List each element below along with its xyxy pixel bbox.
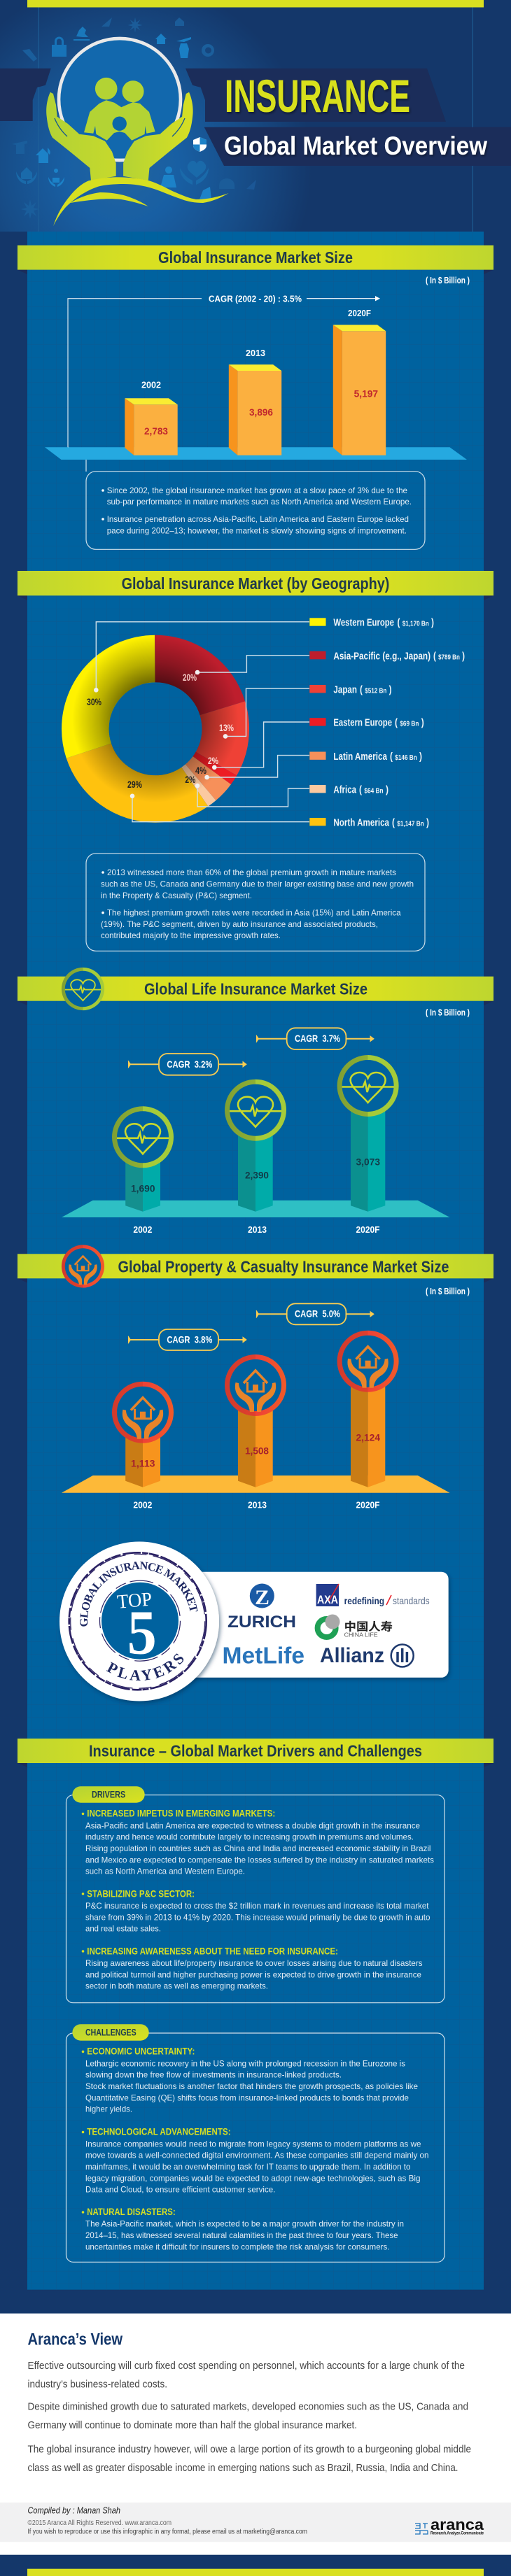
- bar 2002: 2,783: [144, 425, 168, 437]
- commentary box: contributed majorly to the impressive growth rates.: [101, 930, 281, 940]
- column 2002: 2002: [133, 1499, 152, 1510]
- icon: dollar coin: [202, 44, 214, 57]
- commentary box: Insurance penetration across Asia-Pacific, Latin America and Eastern Europe lacked: [107, 514, 409, 524]
- column 2002: [112, 1106, 174, 1235]
- heading banner: [18, 1739, 493, 1767]
- column 2020F: 2020F: [356, 1224, 380, 1235]
- challenge: natural disasters: The Asia-Pacific market, which is expected to be a major growth driver for the industry in: [85, 2219, 404, 2229]
- CAGR pill 3.8%: CAGR 3.8%: [167, 1333, 213, 1345]
- icon: doctor: [160, 167, 176, 187]
- panel: drivers and challenges: [18, 1739, 493, 2262]
- challenges box: [66, 2024, 444, 2262]
- icon: family: [84, 78, 155, 141]
- challenge: natural disasters: uncertainties make it difficult for insurers to complete the risk analysis for consumers.: [85, 2242, 389, 2251]
- challenges pill: [72, 2024, 149, 2041]
- icon: faint house: [175, 17, 184, 26]
- panel: property and casualty insurance market size: [18, 1245, 493, 1510]
- view text: Effective outsourcing will curb fixed cost spending on personnel, which accounts for a large chunk of the: [28, 2361, 465, 2372]
- column 2020F: 3,073: [356, 1156, 380, 1168]
- challenge: technological advancements: Insurance companies would need to migrate from legacy systems to modern platforms as we: [85, 2139, 421, 2149]
- legend: Africa: [333, 784, 357, 795]
- icon: faint pen: [246, 180, 256, 190]
- column 2002: 2002: [133, 1224, 152, 1235]
- bar 2013: [229, 348, 281, 455]
- view text: class as well as greater disposable income in emerging nations such as Brazil, Russia, India and China.: [28, 2463, 458, 2474]
- challenge: economic uncertainty: [82, 2046, 418, 2114]
- leader lines and dots: [94, 622, 309, 822]
- column 2002: 1,690: [131, 1182, 155, 1194]
- driver: emerging markets: Rising population in countries such as China and India and increased economic stability in Brazil: [85, 1843, 431, 1853]
- column 2020F: [337, 1055, 399, 1235]
- logo card: [182, 1572, 449, 1678]
- footer strip: If you wish to reproduce or use this infographic in any format, please email us at marketing@aranca.com: [28, 2528, 307, 2536]
- legend: ( $146 Bn ): [390, 751, 422, 763]
- driver: emerging markets: INCREASED IMPETUS IN EMERGING MARKETS:: [87, 1809, 275, 1819]
- heading banner: Insurance – Global Market Drivers and Challenges: [89, 1742, 422, 1760]
- percentage labels: 4%: [195, 765, 206, 776]
- icon: sunburst top: [127, 17, 143, 32]
- donut chart: [85, 658, 225, 799]
- challenges pill: CHALLENGES: [85, 2026, 136, 2037]
- panel: top 5 players: [59, 1542, 451, 1704]
- heading banner: [18, 246, 493, 274]
- driver: emerging markets: Asia-Pacific and Latin America are expected to witness a double digit growth in the insurance: [85, 1820, 420, 1830]
- commentary box: The highest premium growth rates were recorded in Asia (15%) and Latin America: [107, 908, 401, 918]
- legend: [309, 618, 465, 828]
- challenge: natural disasters: NATURAL DISASTERS:: [87, 2207, 176, 2217]
- heading banner: Global Property & Casualty Insurance Market Size: [118, 1257, 449, 1275]
- challenge: natural disasters: 2014–15, has witnessed several natural calamities in the past three to four years. These: [85, 2230, 398, 2240]
- icon: left hand: [46, 92, 116, 181]
- challenge: economic uncertainty: Quantitative Easing (QE) shifts focus from insurance-linked products to bonds that provide: [85, 2093, 409, 2102]
- logo: China Life: CHINA LIFE: [344, 1632, 378, 1639]
- stamp: top 5: [59, 1542, 223, 1704]
- heading banner: [18, 968, 493, 1010]
- icon: sunburst left: [21, 199, 39, 219]
- challenge: technological advancements: move towards a well-connected digital environment. As these companies still depend mainly on: [85, 2151, 428, 2160]
- icon: swoosh: [53, 177, 229, 226]
- legend: Eastern Europe: [333, 718, 392, 729]
- column 2013: 2013: [248, 1499, 267, 1510]
- icon: cloud: [219, 178, 234, 189]
- logo: Zurich: Z: [255, 1586, 270, 1609]
- header hero: [0, 0, 511, 232]
- logo: MetLife: MetLife: [223, 1643, 304, 1668]
- chart platform: [62, 1475, 449, 1493]
- drivers box: [66, 1786, 444, 2003]
- chart platform: [62, 1201, 449, 1217]
- icon: car wreck: [74, 27, 90, 41]
- challenge: technological advancements: TECHNOLOGICAL ADVANCEMENTS:: [87, 2127, 231, 2137]
- legend: North America: [333, 817, 390, 828]
- title: INSURANCE: INSURANCE: [225, 70, 410, 122]
- challenge: economic uncertainty: ECONOMIC UNCERTAINTY:: [87, 2046, 195, 2057]
- icon: shield: [193, 137, 206, 152]
- commentary box: such as the US, Canada and Germany due to their larger existing base and new growth: [101, 879, 414, 889]
- challenge: technological advancements: legacy migration, companies would be expected to adopt new-age technologies, such as Big: [85, 2173, 420, 2183]
- icon: house in hands: [16, 167, 37, 184]
- icon: person in hands: [48, 169, 64, 187]
- commentary box: [86, 854, 425, 951]
- bar 2013: 3,896: [249, 406, 273, 418]
- icon: graduation cap: [12, 141, 27, 154]
- driver: emerging markets: such as North America and Western Europe.: [85, 1867, 245, 1876]
- dark title bands: [0, 69, 511, 166]
- main blue panel with grid: [27, 232, 484, 2290]
- commentary box: [86, 472, 425, 549]
- bar 2020F: [333, 308, 386, 455]
- column 2013: [225, 1080, 286, 1235]
- bracket line and CAGR arrow: [68, 294, 380, 472]
- legend: ( $789 Bn ): [433, 651, 465, 662]
- chart platform: [45, 447, 467, 460]
- bar 2020F: 5,197: [354, 388, 378, 399]
- icon: bag: [200, 187, 211, 199]
- top accent bar: [27, 0, 484, 7]
- commentary box: in the Property & Casualty (P&C) segment.: [101, 891, 252, 900]
- legend: ( $1,147 Bn ): [392, 817, 429, 828]
- commentary box: sub-par performance in mature markets such as North America and Western Europe.: [107, 497, 412, 507]
- driver: emerging markets: [82, 1809, 434, 1876]
- legend: ( $1,170 Bn ): [398, 618, 434, 629]
- logo: AXA: redefining: [344, 1595, 384, 1606]
- bar 2002: 2002: [141, 380, 161, 390]
- logo: aranca: Research.Analyze.Communicate: [430, 2532, 484, 2536]
- driver: awareness: [82, 1946, 422, 1991]
- CAGR pill 3.7%: CAGR 3.7%: [295, 1033, 340, 1044]
- column 2002: [112, 1382, 174, 1510]
- legend: ( $69 Bn ): [395, 718, 424, 729]
- legend: Western Europe: [333, 618, 394, 629]
- heading banner: Global Insurance Market Size: [158, 248, 353, 267]
- icon: house: [155, 34, 167, 44]
- challenge: technological advancements: Data and Cloud, to ensure efficient customer service.: [85, 2185, 275, 2195]
- icon: faint shield left: [22, 49, 37, 62]
- stamp: top 5: 5: [127, 1598, 157, 1667]
- percentage labels: 2%: [185, 774, 196, 785]
- challenge: economic uncertainty: Lethargic economic recovery in the US along with prolonged recession in the Eurozone is: [85, 2058, 405, 2068]
- panel: global life insurance market size: [18, 968, 493, 1235]
- footer strip: Compiled by : Manan Shah: [28, 2505, 120, 2516]
- driver: awareness: and political turmoil and higher purchasing power is expected to drive growth in the insurance: [85, 1969, 421, 1979]
- CAGR pill 3.7%: [256, 1028, 374, 1049]
- logo: China Life: 中国人寿: [344, 1620, 393, 1633]
- bar 2002: [125, 380, 178, 455]
- legend: Asia-Pacific (e.g., Japan): [333, 651, 430, 662]
- logo: AXA: AXA: [317, 1593, 338, 1606]
- driver: emerging markets: industry and hence would contribute largely to increasing growth in premiums and volumes.: [85, 1832, 414, 1842]
- percentage labels: 13%: [219, 722, 234, 733]
- panel: market by geography: [18, 571, 493, 951]
- footer strip: [0, 2503, 511, 2542]
- unit note: ( In $ Billion ): [426, 1008, 470, 1018]
- stamp: top 5: PLAYERS: [106, 1653, 183, 1680]
- percentage labels: 2%: [208, 755, 218, 766]
- view text: Despite diminished growth due to saturated markets, developed economies such as the US, Canada and: [28, 2402, 468, 2413]
- driver: awareness: Rising awareness about life/property insurance to cover losses arising due to natural disasters: [85, 1958, 423, 1968]
- commentary box: 2013 witnessed more than 60% of the global premium growth in mature markets: [107, 868, 396, 877]
- logo: aranca: aranca: [430, 2516, 484, 2533]
- column 2013: 1,508: [245, 1445, 269, 1456]
- heading banner: [18, 1245, 493, 1288]
- driver: P&C sector: P&C insurance is expected to cross the $2 trillion mark in revenues and increase its total market: [85, 1901, 429, 1911]
- column 2013: [225, 1354, 286, 1510]
- icon: white ring: [59, 38, 181, 160]
- percentage labels: 29%: [127, 779, 142, 790]
- CAGR pill 5.0%: CAGR 5.0%: [295, 1308, 340, 1319]
- panel: global insurance market size: [18, 246, 493, 549]
- percentage labels: 30%: [87, 696, 102, 707]
- commentary box: pace during 2002–13; however, the market is slowly showing signs of improvement.: [107, 525, 407, 535]
- bottom accent bar: [27, 2569, 484, 2576]
- CAGR pill 3.2%: [128, 1054, 246, 1075]
- commentary box: (19%). The P&C segment, driven by auto insurance and associated products,: [101, 919, 378, 929]
- CAGR pill 5.0%: [256, 1303, 374, 1324]
- view text: Germany will continue to dominate more than half the global insurance market.: [28, 2420, 357, 2431]
- icon: umbrella person: [176, 37, 191, 58]
- driver: awareness: INCREASING AWARENESS ABOUT THE NEED FOR INSURANCE:: [87, 1946, 338, 1956]
- view text: [28, 2361, 471, 2474]
- panel: Aranca's view: [0, 2314, 511, 2555]
- unit note: ( In $ Billion ): [426, 1287, 470, 1296]
- stamp: top 5: TOP: [116, 1589, 153, 1613]
- drivers pill: [72, 1786, 145, 1803]
- column 2013: 2013: [248, 1224, 267, 1235]
- heading banner: Global Insurance Market (by Geography): [122, 574, 389, 593]
- challenge: economic uncertainty: higher yields.: [85, 2104, 132, 2114]
- challenge: economic uncertainty: Stock market fluctuations is another factor that hinders the growth prospects, as policies like: [85, 2081, 418, 2091]
- logo: China Life: [318, 1615, 393, 1639]
- CAGR pill 3.8%: [128, 1329, 246, 1350]
- column 2002: 1,113: [131, 1458, 155, 1469]
- legend: ( $64 Bn ): [359, 784, 388, 795]
- icon: burning house: [36, 148, 50, 163]
- percentage labels: [87, 672, 234, 790]
- column 2020F: 2,124: [356, 1431, 380, 1443]
- driver: P&C sector: STABILIZING P&C SECTOR:: [87, 1888, 195, 1899]
- driver: P&C sector: and real estate sales.: [85, 1924, 161, 1934]
- driver: P&C sector: [82, 1888, 430, 1934]
- icon: heart in hands: [180, 161, 209, 185]
- stamp: top 5: GLOBAL INSURANCE MARKET: [80, 1562, 198, 1627]
- icon: right hand: [123, 92, 193, 181]
- logo: Zurich: ZURICH: [227, 1613, 296, 1632]
- column 2020F: [337, 1331, 399, 1510]
- heading banner: Global Life Insurance Market Size: [144, 980, 368, 998]
- challenge: natural disasters: [82, 2207, 404, 2251]
- logo: Allianz: Allianz: [320, 1644, 384, 1667]
- view text: industry’s business-related costs.: [28, 2379, 167, 2390]
- driver: emerging markets: and Mexico are expected to compensate the losses suffered by the industry in saturated markets: [85, 1855, 434, 1864]
- background insurance icons: [12, 17, 256, 219]
- column 2013: 2,390: [245, 1170, 269, 1181]
- bracket line and CAGR arrow: CAGR (2002 - 20) : 3.5%: [209, 294, 302, 304]
- bar 2013: 2013: [246, 348, 265, 358]
- challenge: technological advancements: mainframes, it would be an overwhelming task for IT teams to upgrade them. In addition to: [85, 2162, 411, 2172]
- logo: AXA: standards: [393, 1595, 430, 1606]
- CAGR pill 3.2%: CAGR 3.2%: [167, 1059, 213, 1070]
- column 2020F: 2020F: [356, 1499, 380, 1510]
- challenge: economic uncertainty: slowing down the free flow of investments in insurance-linked products.: [85, 2070, 342, 2080]
- legend: Japan: [333, 684, 357, 695]
- logo: AXA: [316, 1584, 430, 1606]
- legend: ( $512 Bn ): [360, 684, 392, 695]
- logo: aranca: [415, 2516, 484, 2536]
- icon: lock: [52, 36, 66, 57]
- footer strip: ©2015 Aranca All Rights Reserved. www.aranca.com: [28, 2519, 172, 2527]
- icon: faint tool: [102, 17, 112, 27]
- bar 2020F: 2020F: [348, 308, 371, 318]
- driver: awareness: sector in both mature as well as emerging markets.: [85, 1981, 268, 1991]
- view heading: Aranca’s View: [28, 2330, 122, 2349]
- drivers pill: DRIVERS: [92, 1788, 125, 1799]
- challenge: technological advancements: [82, 2127, 428, 2195]
- driver: P&C sector: share from 39% in 2013 to 41% by 2020. This increase would primarily be due to growth in auto: [85, 1912, 430, 1922]
- unit note: ( In $ Billion ): [426, 276, 470, 285]
- logo: Zurich: [227, 1584, 296, 1632]
- logo: family in hands: [46, 38, 229, 226]
- percentage labels: 20%: [183, 672, 197, 683]
- legend: Latin America: [333, 751, 388, 763]
- commentary box: Since 2002, the global insurance market has grown at a slow pace of 3% due to the: [107, 486, 407, 495]
- view text: The global insurance industry however, will owe a large portion of its growth to a burgeoning global middle: [28, 2444, 471, 2456]
- heading banner: [18, 571, 493, 600]
